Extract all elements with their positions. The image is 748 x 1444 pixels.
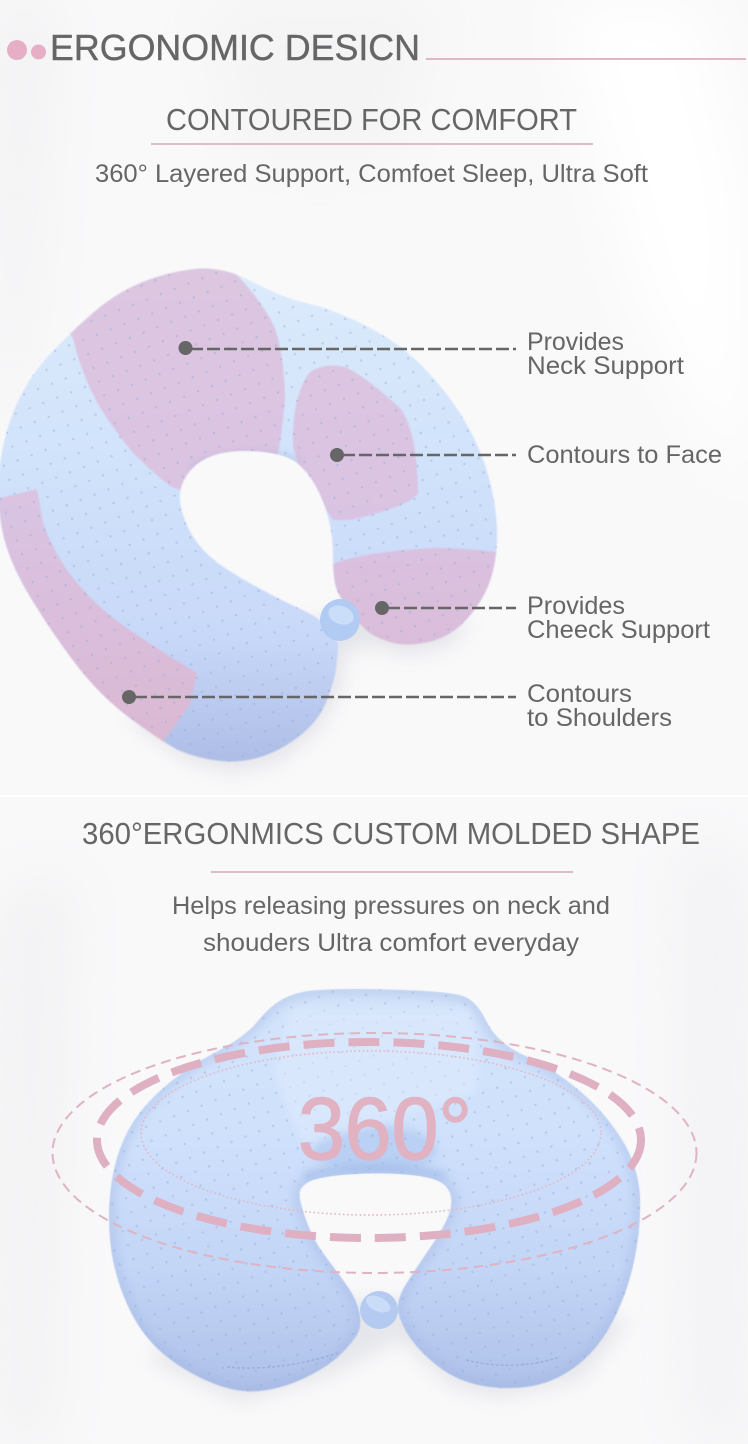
- ring: outer thin dashed: [52, 1033, 696, 1273]
- pink zone: face: [293, 365, 418, 520]
- heading rule: [211, 871, 573, 873]
- pillow body: [109, 989, 640, 1391]
- right seam: [466, 1357, 560, 1365]
- pillow shadow: [130, 600, 470, 772]
- pink zone: cheek: [332, 548, 496, 645]
- knot: [320, 599, 360, 641]
- section: ergonomic design header: [7, 27, 746, 68]
- pillow shadow: [150, 1300, 630, 1402]
- label: 360 degrees: 360°: [298, 1079, 472, 1178]
- inner hole shading: [304, 1168, 446, 1176]
- callout: neck support: Neck Support: [527, 352, 684, 380]
- callouts: [122, 328, 722, 732]
- perforation texture: [0, 260, 500, 770]
- callout: shoulders: Contours: [527, 680, 632, 708]
- pink zone: neck: [60, 262, 285, 490]
- callout: contours to face: Contours to Face: [527, 441, 722, 469]
- ring: inner dotted: [141, 1051, 601, 1215]
- flap highlight: [274, 1010, 479, 1147]
- callout: contours to face: [330, 441, 722, 469]
- description: [172, 892, 610, 957]
- callout: cheek support: Provides: [527, 592, 625, 620]
- callout: neck support: [178, 328, 684, 380]
- heading text: 360°ERGONMICS CUSTOM MOLDED SHAPE: [82, 816, 700, 851]
- ring: thick dashed: [97, 1042, 641, 1238]
- knot: [360, 1291, 398, 1329]
- callout: neck support: Provides: [527, 328, 624, 356]
- pillow body: [0, 262, 505, 762]
- callout: cheek support: Cheeck Support: [527, 616, 710, 644]
- pillow front view with 360 rings: [52, 985, 696, 1402]
- title: ERGONOMIC DESICN: [50, 27, 420, 68]
- callout: shoulders: [122, 680, 672, 732]
- pink zone: shoulder: [0, 489, 197, 745]
- description: shouders Ultra comfort everyday: [203, 929, 580, 957]
- callout: shoulders: to Shoulders: [527, 704, 672, 732]
- pillow with pink support zones: [0, 260, 505, 772]
- icon: small pink dot: [31, 44, 46, 60]
- perforation texture: [100, 985, 645, 1397]
- icon: large pink dot: [7, 40, 27, 60]
- heading: contoured for comfort: [95, 102, 648, 188]
- left seam: [227, 1353, 338, 1368]
- heading rule: [151, 143, 593, 145]
- heading text: CONTOURED FOR COMFORT: [166, 102, 577, 137]
- heading: custom molded shape: [82, 816, 700, 957]
- callout: cheek support: [375, 592, 710, 644]
- title rule: [426, 58, 746, 60]
- subtitle: 360° Layered Support, Comfoet Sleep, Ultra Soft: [95, 160, 648, 188]
- description: Helps releasing pressures on neck and: [172, 892, 610, 920]
- body shading: [109, 989, 640, 1391]
- pink zones: [0, 262, 505, 745]
- inner shading: [192, 455, 300, 468]
